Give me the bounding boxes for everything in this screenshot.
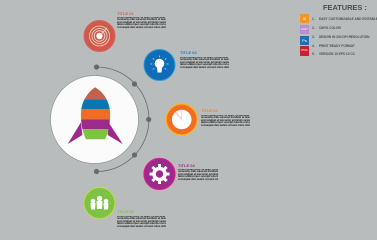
- text block: title 04: [178, 163, 218, 181]
- text: PRINT READY FORMAT: [319, 44, 355, 48]
- icon: people group: [84, 188, 115, 218]
- text block: title 03: [201, 108, 250, 127]
- text block: title 02: [180, 50, 229, 69]
- feature 4: 4.: [312, 44, 315, 48]
- text block: title 01: TITLE 01: [117, 11, 134, 16]
- icon: light bulb: [144, 50, 175, 80]
- feature 1: 1.: [312, 17, 315, 21]
- icon: CMYK file: [300, 25, 309, 34]
- icon: PS file: Ps: [302, 38, 307, 43]
- icon: AI file: [300, 14, 309, 23]
- text block: title 03: TITLE 03: [201, 108, 218, 113]
- feature 3: [312, 35, 370, 39]
- connector arc with dots: [94, 64, 151, 174]
- icon: target: [84, 20, 115, 52]
- text block: title 01: [117, 11, 166, 29]
- central white circle: [50, 76, 138, 164]
- icon: AI file: Ai: [303, 16, 306, 21]
- feature 2: 2.: [312, 26, 315, 30]
- icon: PNG file: PNG: [301, 48, 308, 52]
- text block: title 02: TITLE 02: [180, 50, 197, 55]
- text block: title 05: TITLE 05: [117, 209, 134, 214]
- text: CMYK COLOR: [319, 26, 341, 30]
- feature 5: [312, 52, 355, 56]
- feature 2: [312, 26, 341, 30]
- text block: title 04: TITLE 04: [178, 163, 195, 168]
- text: VERSION 10 EPS 10 CC: [319, 52, 355, 56]
- feature 3: 3.: [312, 35, 315, 39]
- feature 4: [312, 44, 355, 48]
- icon: PS file: [300, 36, 309, 45]
- icon: PNG file: [300, 46, 309, 56]
- icon: gear: [144, 158, 175, 190]
- features heading: FEATURES :: [323, 3, 367, 12]
- text: EASY CUSTOMIZABLE AND EDITABLE: [319, 17, 377, 21]
- text block: title 05: [117, 209, 166, 228]
- feature 5: 5.: [312, 52, 315, 56]
- icon: striped rocket: [68, 86, 123, 144]
- icon: CMYK file: CMY: [301, 27, 308, 31]
- text: DESIGN IN 300 DPI RESOLUTION: [319, 35, 369, 39]
- timeline and rocket graphic: [50, 20, 198, 219]
- icon: pie chart: [166, 104, 197, 135]
- feature 1: [312, 17, 377, 21]
